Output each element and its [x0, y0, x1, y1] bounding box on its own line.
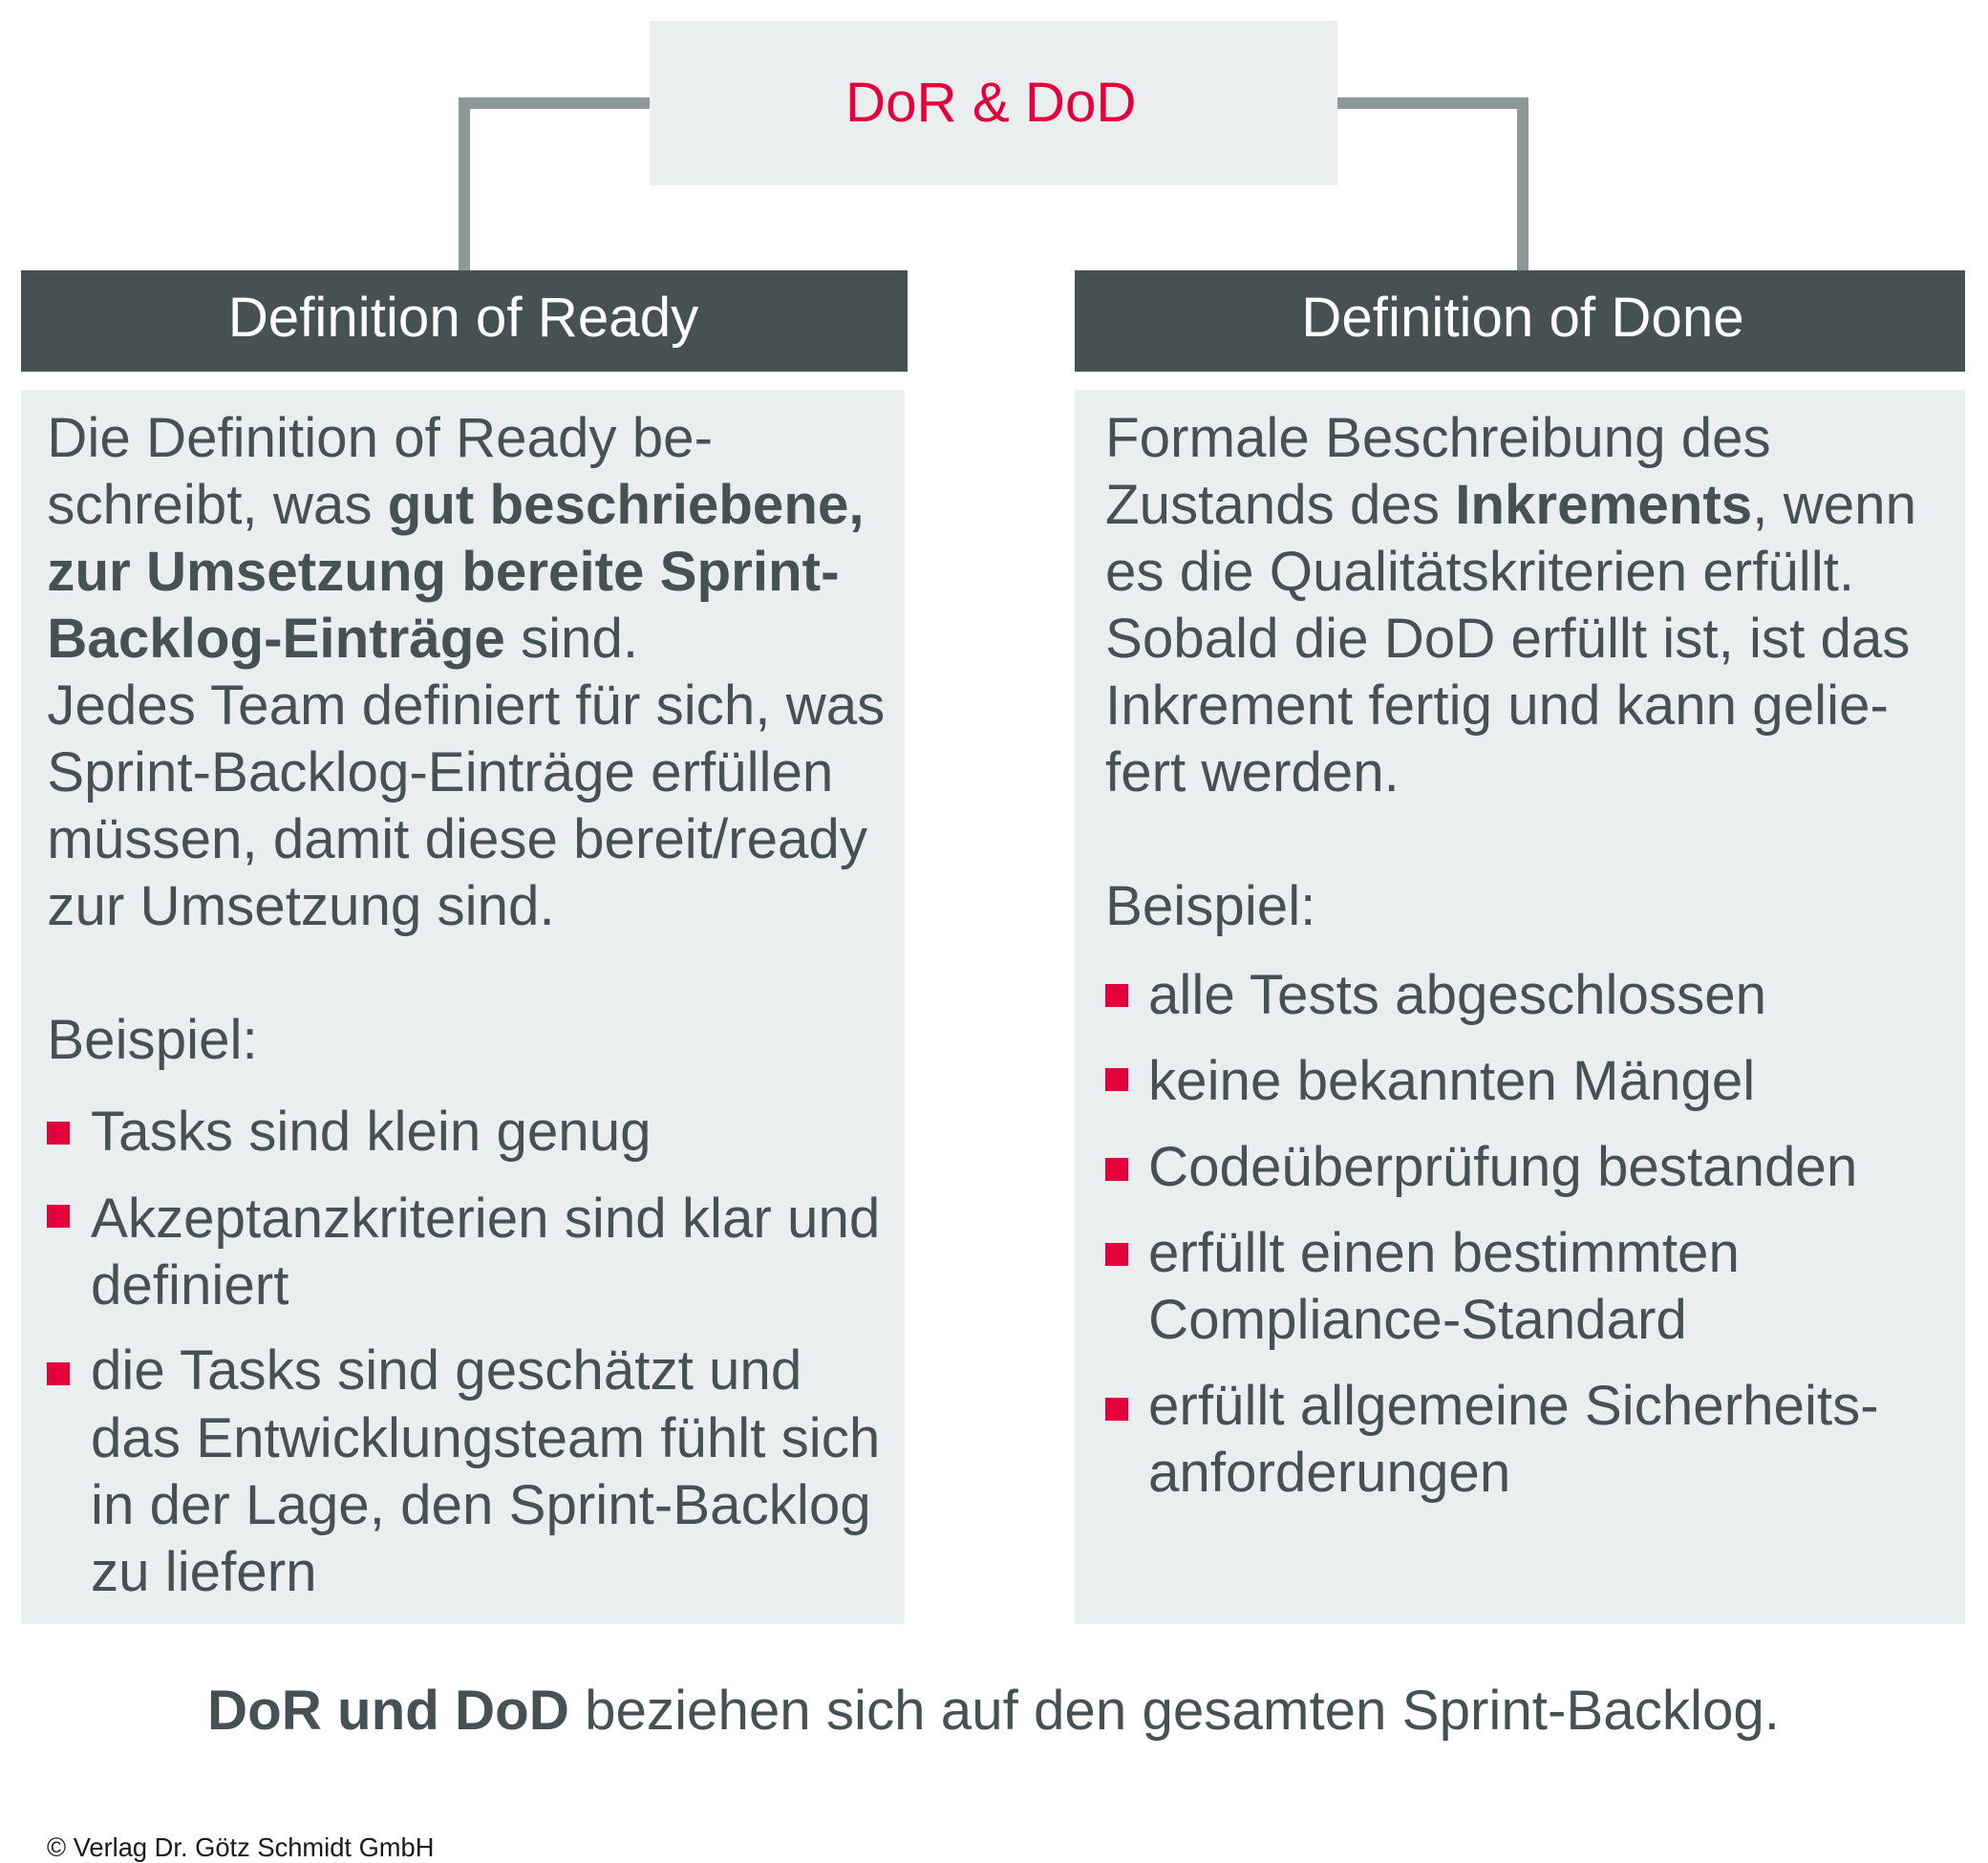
example heading: Beispiel:: [1105, 875, 1315, 937]
bullet list: Compliance-Standard: [1148, 1289, 1687, 1351]
header: Definition of Done: Definition of Done: [1301, 287, 1744, 349]
panel: Definition of Done: [1075, 390, 1965, 1624]
description text: Sprint-Backlog-Einträge erfüllen: [47, 741, 833, 803]
description text: Jedes Team definiert für sich, was: [47, 675, 885, 737]
bullet list: definiert: [91, 1254, 289, 1317]
description text: schreibt, was gut beschriebene,: [47, 474, 865, 536]
header: Definition of Done: [1075, 270, 1965, 372]
bullet list: das Entwicklungsteam fühlt sich: [91, 1407, 880, 1469]
bullet list: [1105, 964, 1879, 1504]
bullet list: erfüllt einen bestimmten: [1148, 1222, 1740, 1284]
description text: Backlog-Einträge sind.: [47, 608, 638, 670]
bullet list: anforderungen: [1148, 1442, 1510, 1504]
description text: [1105, 407, 1916, 803]
bullet list: keine bekannten Mängel: [1148, 1050, 1755, 1112]
description text: müssen, damit diese bereit/ready: [47, 808, 868, 870]
description text: Zustands des Inkrements, wenn: [1105, 474, 1916, 536]
title box: DoR & DoD: [845, 72, 1137, 134]
bullet list: Akzeptanzkriterien sind klar und: [91, 1188, 880, 1250]
description text: es die Qualitätskriterien erfüllt.: [1105, 541, 1854, 603]
copyright: © Verlag Dr. Götz Schmidt GmbH: [47, 1832, 434, 1862]
bullet list: in der Lage, den Sprint-Backlog: [91, 1474, 871, 1536]
description text: zur Umsetzung sind.: [47, 875, 555, 937]
bullet list: erfüllt allgemeine Sicherheits-: [1148, 1375, 1879, 1437]
description text: Formale Beschreibung des: [1105, 407, 1771, 469]
summary sentence: DoR und DoD beziehen sich auf den gesamten Sprint-Backlog.: [207, 1680, 1780, 1742]
bullet list: alle Tests abgeschlossen: [1148, 964, 1766, 1026]
bullet list: zu liefern: [91, 1541, 317, 1603]
description text: Inkrement fertig und kann gelie-: [1105, 675, 1889, 737]
title box: [650, 21, 1337, 185]
connector: title to Definition of Done: [1337, 103, 1523, 270]
header: Definition of Ready: Definition of Ready: [228, 287, 699, 349]
description text: fert werden.: [1105, 741, 1400, 803]
description text: Sobald die DoD erfüllt ist, ist das: [1105, 608, 1910, 670]
example heading: Beispiel:: [47, 1009, 258, 1071]
panel: Definition of Ready: [21, 390, 905, 1624]
description text: [47, 407, 885, 937]
bullet list: [47, 1101, 880, 1603]
bullet list: Codeüberprüfung bestanden: [1148, 1136, 1857, 1198]
bullet list: Tasks sind klein genug: [91, 1101, 652, 1163]
connector: title to Definition of Ready: [464, 103, 650, 270]
description text: zur Umsetzung bereite Sprint-: [47, 541, 840, 603]
description text: Die Definition of Ready be-: [47, 407, 713, 469]
bullet list: die Tasks sind geschätzt und: [91, 1339, 802, 1402]
header: Definition of Ready: [21, 270, 908, 372]
